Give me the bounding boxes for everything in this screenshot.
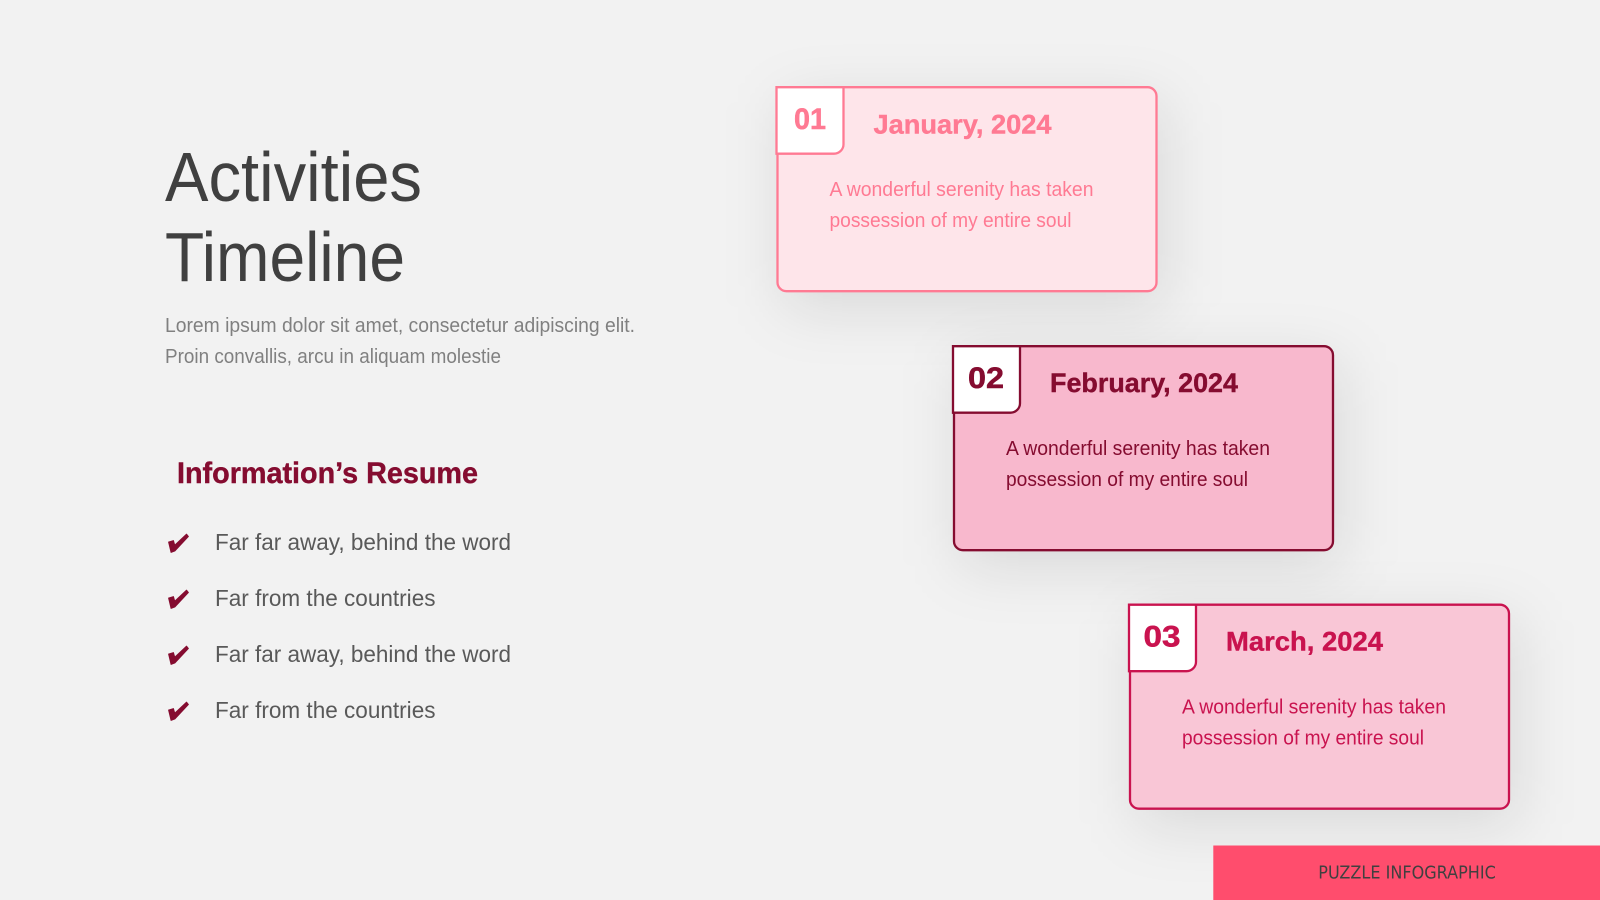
title: Activities [165, 138, 422, 216]
title [165, 138, 422, 296]
footer banner [1213, 846, 1600, 900]
number badge [776, 87, 844, 154]
intro paragraph: Proin convallis, arcu in aliquam molestie [165, 345, 501, 368]
footer banner: PUZZLE INFOGRAPHIC [1318, 862, 1496, 884]
card date: March, 2024 [1226, 626, 1383, 656]
number badge [1129, 605, 1196, 671]
card 02: February [953, 346, 1340, 566]
icon: check mark [168, 646, 188, 664]
card text [1006, 437, 1270, 491]
card date: February, 2024 [1050, 368, 1238, 398]
subheading: information's resume: Information’s Resume [177, 457, 478, 490]
list item 3: Far far away, behind the word [215, 641, 511, 667]
card shadow [784, 102, 1164, 307]
card body [954, 346, 1333, 550]
card text: A wonderful serenity has taken [1182, 696, 1446, 718]
intro paragraph: Lorem ipsum dolor sit amet, consectetur adipiscing elit. [165, 314, 635, 337]
icon: check mark [168, 702, 188, 720]
number badge: 02 [968, 362, 1004, 395]
card text: possession of my entire soul [1006, 468, 1248, 491]
card body [778, 87, 1156, 291]
number badge: 01 [794, 103, 826, 136]
list item 2: Far from the countries [215, 585, 436, 611]
number badge [953, 346, 1020, 413]
card text: possession of my entire soul [830, 209, 1072, 232]
card 01: January [776, 87, 1164, 307]
icon: check mark [168, 590, 188, 608]
card text [1182, 696, 1446, 750]
title: Timeline [165, 218, 405, 296]
card text [830, 178, 1094, 232]
intro paragraph [165, 314, 635, 368]
card shadow [1136, 620, 1516, 824]
card date: January, 2024 [874, 109, 1052, 139]
card text: A wonderful serenity has taken [830, 178, 1094, 201]
card text: possession of my entire soul [1182, 727, 1424, 750]
card text: A wonderful serenity has taken [1006, 437, 1270, 460]
checklist [168, 529, 511, 723]
card body [1130, 605, 1509, 809]
card 03: March [1129, 605, 1516, 824]
list item 1: Far far away, behind the word [215, 529, 511, 555]
icon: check mark [168, 534, 188, 552]
list item 4: Far from the countries [215, 697, 436, 723]
number badge: 03 [1144, 620, 1180, 653]
card shadow [960, 361, 1340, 566]
